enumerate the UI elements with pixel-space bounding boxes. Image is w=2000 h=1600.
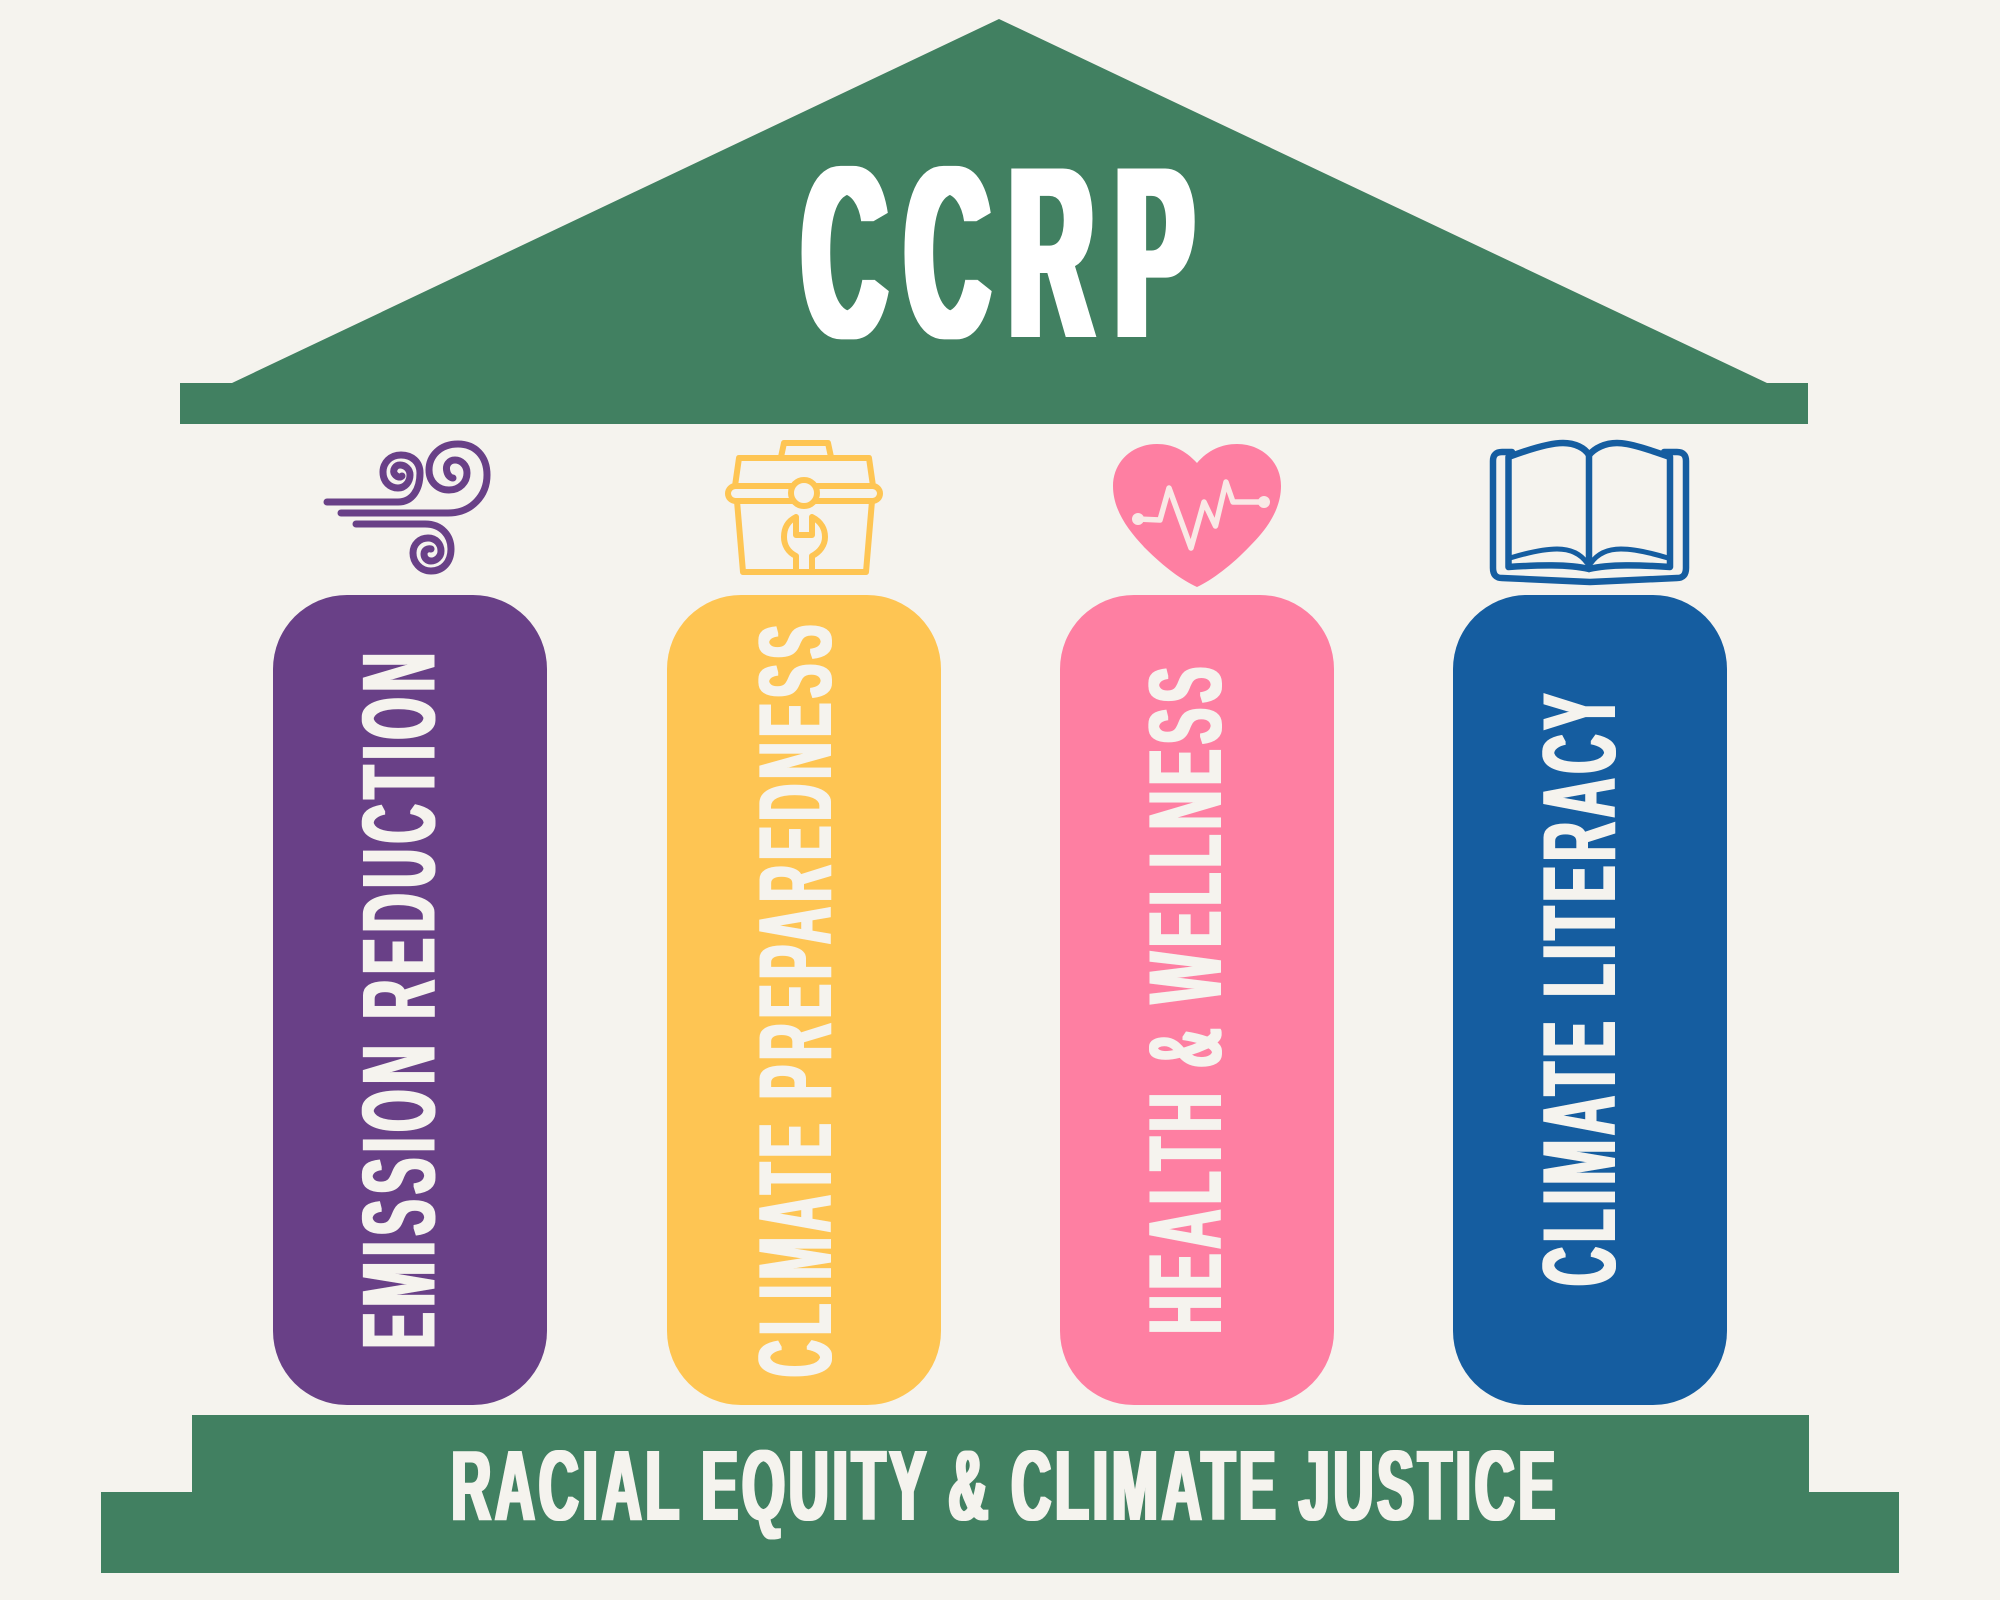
pillar label: EMISSION REDUCTION <box>340 653 457 1348</box>
pillar: emission reduction <box>273 595 547 1405</box>
icon: toolbox <box>728 443 880 572</box>
pillar label: CLIMATE PREPAREDNESS <box>738 625 854 1377</box>
icon: wind <box>327 444 487 571</box>
pillar label: HEALTH & WELLNESS <box>1127 667 1244 1334</box>
icon: open book <box>1493 443 1686 582</box>
pillar: climate literacy <box>1453 595 1727 1405</box>
base label: RACIAL EQUITY & CLIMATE JUSTICE <box>451 1431 1555 1542</box>
pillar label: CLIMATE LITERACY <box>1521 694 1638 1286</box>
title: CCRP: CCRP <box>803 116 1193 389</box>
base: foundation <box>101 1415 1899 1573</box>
roof <box>180 19 1808 424</box>
pillar: climate preparedness <box>667 595 941 1405</box>
icon: heart with pulse <box>1113 444 1281 587</box>
pillar: health and wellness <box>1060 595 1334 1405</box>
